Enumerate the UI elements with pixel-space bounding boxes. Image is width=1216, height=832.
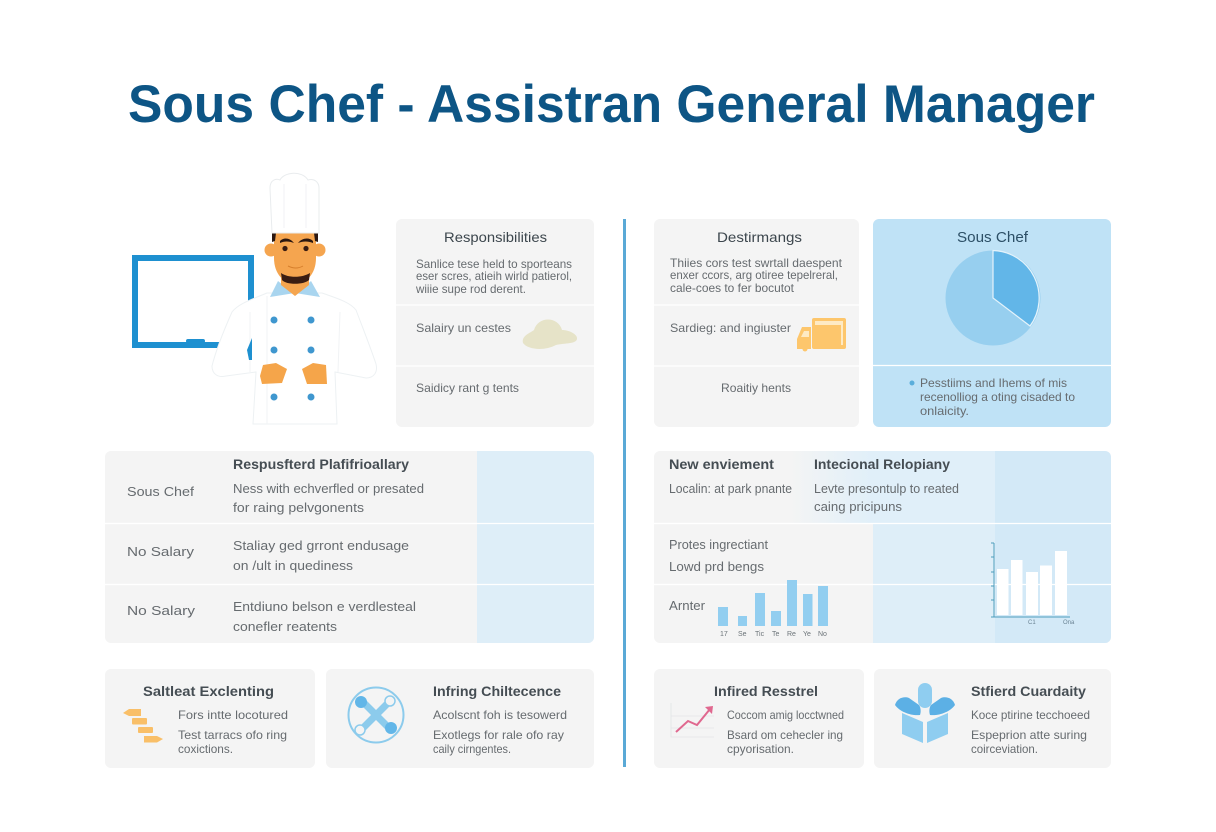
text block: [670, 256, 843, 295]
chef hair and eyes: [272, 233, 318, 251]
center divider: [623, 219, 626, 767]
headings: New enviement: [669, 457, 775, 472]
icon: crossed tools: [348, 688, 404, 742]
pie chart: [946, 250, 1040, 346]
text block: wiiie supe rod derent.: [415, 282, 526, 296]
heading: Stfierd Cuardaity: [971, 684, 1087, 699]
bullet text: recenolliog a oting cisaded to: [920, 390, 1075, 404]
text block: caily cirngentes.: [433, 742, 511, 756]
panel: responsibilities: [396, 219, 594, 427]
row text: Saidicy rant g tents: [416, 381, 519, 395]
chef ears: [264, 244, 278, 256]
row text: Salairy un cestes: [416, 321, 511, 335]
text block: Acolscnt foh is tesowerd: [433, 708, 567, 722]
text block: Sanlice tese held to sporteans: [416, 257, 572, 271]
panel: environment table: [654, 451, 1111, 643]
chef neck: [281, 272, 309, 296]
board edge sliver: [247, 338, 252, 360]
icon: dough blob: [523, 320, 577, 349]
panel: stfierd cuardaity: [874, 669, 1111, 768]
text block: Lowd prd bengs: [669, 559, 765, 574]
chef hat: [270, 173, 319, 233]
panel: responsibilities table: [105, 451, 594, 643]
text block: Fors intte locotured: [178, 708, 288, 722]
text block: [415, 257, 572, 296]
text block: Koce ptirine tecchoeed: [971, 708, 1090, 722]
text block: cpyorisation.: [727, 742, 794, 756]
heading: Sous Chef: [957, 229, 1029, 246]
text block: caing pricipuns: [814, 499, 903, 514]
row: sous chef: [127, 481, 424, 515]
row: no salary: on /ult in quediness: [233, 558, 354, 573]
chef beard: [281, 273, 310, 284]
bar chart: blue: Te: [772, 631, 780, 638]
bullet text: onlaicity.: [920, 404, 969, 418]
bar chart: blue: Se: [738, 631, 747, 638]
icon: delivery truck: [797, 318, 846, 352]
text block: Bsard om cehecler ing: [727, 728, 843, 742]
chef hands: [260, 363, 287, 384]
row: sous chef: for raing pelvgonents: [233, 500, 365, 515]
row: no salary: Staliay ged grront endusage: [233, 538, 409, 553]
text block: eser scres, atieih wirld patierol,: [416, 269, 572, 283]
text block: [669, 481, 959, 613]
bar chart: white: C1: [1028, 620, 1036, 626]
panel: saltleat exclenting: [105, 669, 315, 768]
text block: Levte presontulp to reated: [814, 481, 959, 496]
text block: cale-coes to fer bocutot: [670, 281, 795, 295]
table heading: Respusfterd Plafifrioallary: [233, 457, 410, 472]
heading: Saltleat Exclenting: [143, 684, 274, 699]
row: sous chef: Ness with echverfled or presated: [233, 481, 424, 496]
text block: enxer ccors, arg otiree tepelreral,: [670, 268, 838, 282]
row: no salary: No Salary: [127, 603, 196, 618]
bar chart: blue: 17: [720, 631, 728, 638]
text block: coxictions.: [178, 742, 233, 756]
text block: coirceviation.: [971, 742, 1038, 756]
bar chart: white: [991, 543, 1075, 626]
text block: Test tarracs ofo ring: [178, 728, 287, 742]
illustration: chef: [212, 173, 377, 424]
row: no salary: No Salary: [127, 544, 195, 559]
panel: sous chef pie: [873, 219, 1111, 427]
chef coat: [212, 293, 377, 424]
row: no salary: conefler reatents: [233, 619, 338, 634]
icon: open box: [895, 683, 955, 743]
bar chart: blue: Re: [787, 631, 796, 638]
row: sous chef: Sous Chef: [127, 484, 194, 499]
heading: Infired Resstrel: [714, 684, 818, 699]
heading: Responsibilities: [444, 229, 547, 245]
text block: Protes ingrectiant: [669, 537, 768, 552]
chef collar: [270, 281, 320, 297]
text block: Localin: at park pnante: [669, 481, 792, 496]
row text: Roaitiy hents: [721, 381, 791, 395]
icon: line chart: [671, 703, 714, 737]
text block: Thiies cors test swrtall daespent: [670, 256, 843, 270]
row: no salary: [127, 599, 416, 634]
text block: [178, 708, 288, 756]
text block: Coccom amig locctwned: [727, 708, 844, 722]
chef face: [274, 233, 316, 284]
chef buttons: [270, 316, 314, 400]
text block: [727, 708, 844, 756]
bar chart: white: Ona: [1063, 620, 1075, 626]
bar chart: blue: Tic: [755, 631, 765, 638]
text block: Arnter: [669, 598, 706, 613]
text block: Exotlegs for rale ofo ray: [433, 728, 564, 742]
icon: step arrows: [123, 709, 163, 742]
text block: Espeprion atte suring: [971, 728, 1087, 742]
text block: [433, 708, 567, 756]
panel: infired resstrel: [654, 669, 864, 768]
bar chart: blue: No: [818, 631, 827, 638]
panel: environment table: Intecional Relopiany: [814, 457, 951, 472]
title: Sous Chef - Assistran General Manager: [128, 75, 1095, 134]
text block: [971, 708, 1090, 756]
heading: Destirmangs: [717, 229, 802, 245]
bullet text: [910, 376, 1075, 418]
bar chart: blue: [718, 580, 828, 638]
bullet text: Pesstiims and Ihems of mis: [920, 376, 1067, 390]
row: no salary: Entdiuno belson e verdlesteal: [233, 599, 416, 614]
bar chart: blue: Ye: [803, 631, 811, 638]
panel: infring chiltecence: [326, 669, 594, 768]
row: no salary: [127, 538, 409, 573]
row text: Sardieg: and ingiuster: [670, 321, 791, 335]
heading: Infring Chiltecence: [433, 684, 562, 699]
panel: destirmangs: [654, 219, 859, 427]
icon: whiteboard: [135, 258, 251, 345]
